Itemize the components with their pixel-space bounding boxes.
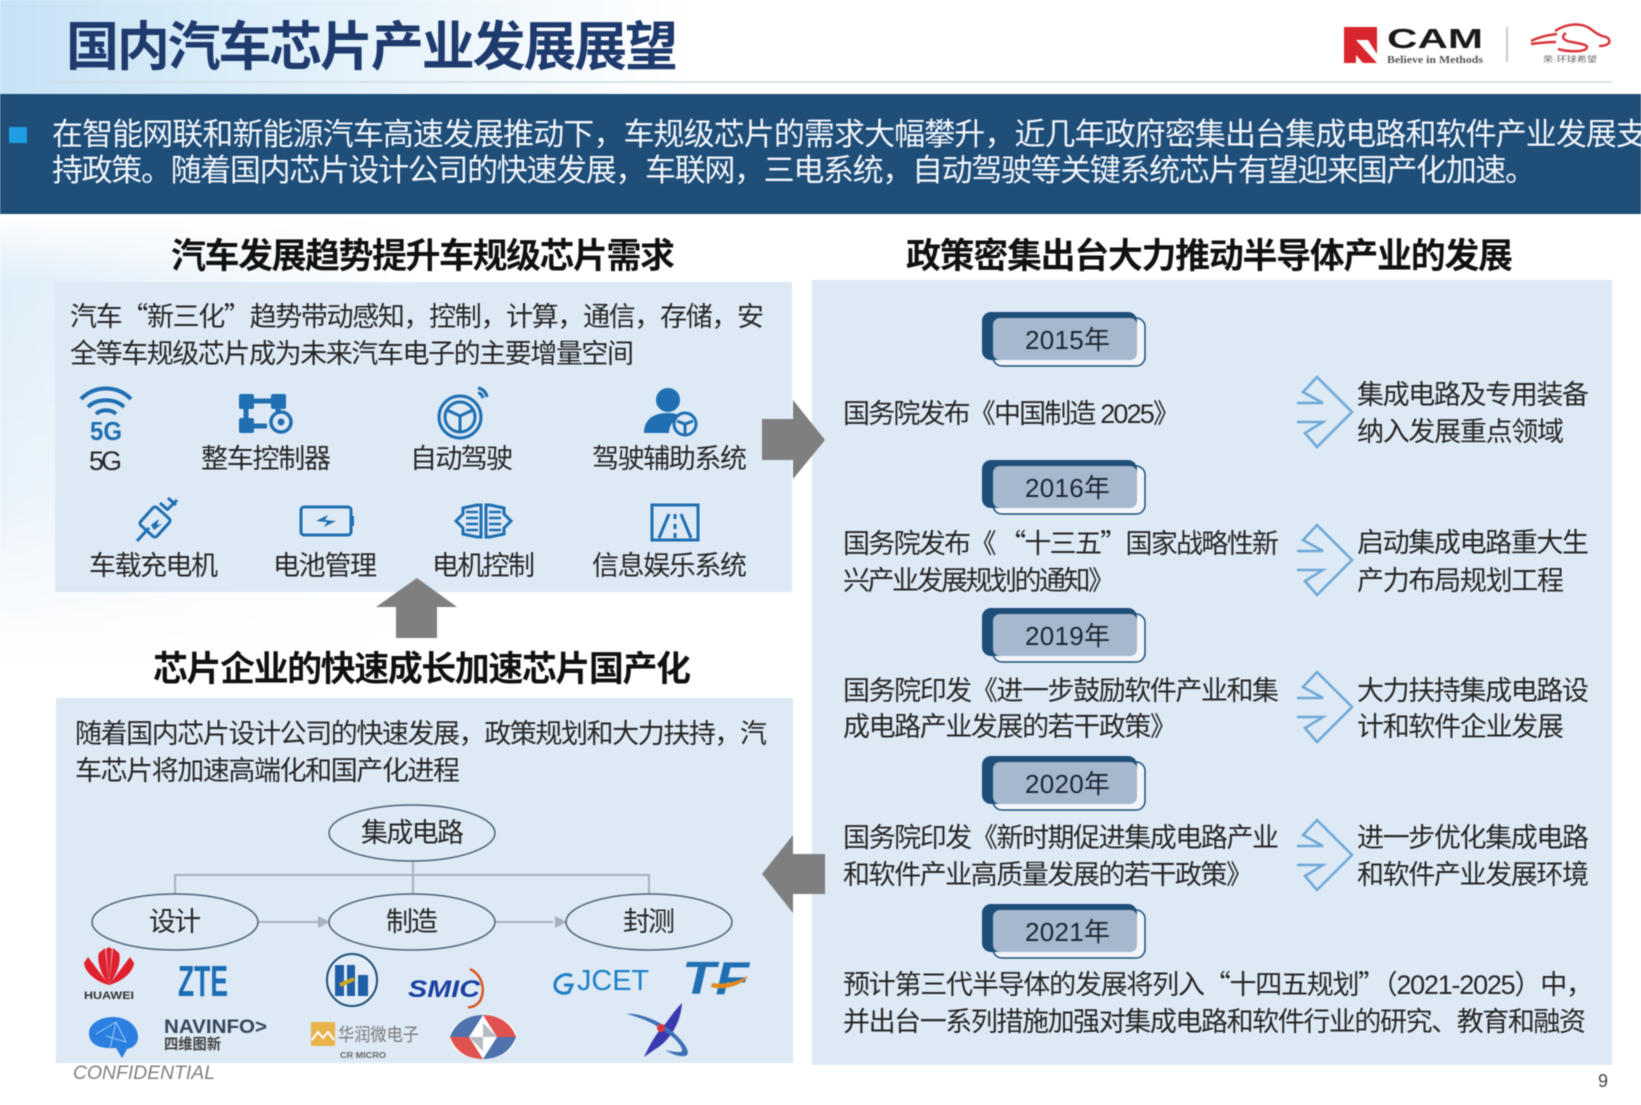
- year badge: 2021: 2021年: [1025, 917, 1110, 947]
- logo: diamond emblem: [450, 1015, 516, 1059]
- policy text 2015: 国务院发布《中国制造 2025》: [843, 399, 1180, 429]
- year badge: 2015: [982, 312, 1145, 366]
- policy text 2020: 和软件产业高质量发展的若干政策》: [843, 860, 1253, 890]
- banner text: 在智能网联和新能源汽车高速发展推动下，车规级芯片的需求大幅攀升，近几年政府密集出台集成电路和软件产业发展支: [52, 117, 1641, 152]
- confidential mark: CONFIDENTIAL: [73, 1063, 215, 1084]
- node: 封测: [566, 894, 732, 950]
- outcome 2020: 进一步优化集成电路: [1357, 823, 1589, 853]
- outcome 2019: 计和软件企业发展: [1357, 712, 1564, 742]
- year badge: 2020: 2020年: [1025, 769, 1110, 799]
- policy text 2021: 预计第三代半导体的发展将列入“十四五规划”（2021-2025）中，: [843, 963, 1593, 1002]
- node: 制造: 制造: [386, 907, 438, 937]
- outcome 2019: 大力扶持集成电路设: [1357, 676, 1589, 706]
- icon: charger: [137, 498, 177, 541]
- panel: chip companies: [56, 698, 793, 1063]
- label: vehicle controller: 整车控制器: [201, 444, 331, 474]
- intro banner: [0, 94, 1641, 214]
- chevron 2020: [1297, 820, 1352, 890]
- logo: NavInfo: 四维图新: [164, 1035, 221, 1053]
- year badge: 2020: [982, 756, 1145, 810]
- logo: ZTE: ZTE: [178, 957, 228, 1006]
- icon: battery: [301, 507, 354, 535]
- outcome 2016: 启动集成电路重大生: [1357, 528, 1589, 558]
- outcome 2016: 产力布局规划工程: [1357, 566, 1564, 596]
- tree connectors: [175, 861, 649, 928]
- outcome 2015: 纳入发展重点领域: [1357, 417, 1564, 447]
- heading: policy: 政策密集出台大力推动半导体产业的发展: [906, 237, 1513, 276]
- page number: 9: [1598, 1071, 1608, 1091]
- logo: NavInfo: [164, 1017, 267, 1053]
- panel: demand: [55, 282, 792, 592]
- chevron 2015: [1297, 377, 1352, 447]
- node: 制造: [329, 894, 495, 950]
- label: infotainment: 信息娱乐系统: [592, 551, 747, 581]
- policy text 2019: 成电路产业发展的若干政策》: [843, 712, 1177, 742]
- icon: 5G: [81, 388, 131, 446]
- chevron 2019: [1297, 672, 1352, 742]
- year badge: 2015: 2015年: [1025, 325, 1110, 355]
- label: motor: 电机控制: [432, 551, 535, 581]
- logo: car: [1507, 24, 1609, 64]
- logo: SMIC: [408, 969, 483, 1007]
- heading: chip companies: 芯片企业的快速成长加速芯片国产化: [153, 650, 691, 689]
- policy text 2020: [843, 823, 1279, 890]
- logo: CR Micro: 华润微电子: [338, 1025, 419, 1045]
- icon: infotainment: [652, 505, 698, 540]
- logo: Hua Hong: [327, 954, 377, 1006]
- logo: CAM: [1344, 23, 1483, 66]
- panel: demand: 汽车“新三化”趋势带动感知，控制，计算，通信，存储，安: [70, 295, 764, 334]
- outcome 2015: 集成电路及专用装备: [1357, 380, 1589, 410]
- bullet: [9, 127, 27, 143]
- policy text 2021: 并出台一系列措施加强对集成电路和软件行业的研究、教育和融资: [843, 1007, 1586, 1037]
- node: 封测: 封测: [623, 907, 675, 937]
- policy text 2019: [843, 676, 1279, 742]
- panel: chip companies: 车芯片将加速高端化和国产化进程: [75, 756, 460, 786]
- label: 5G: 5G: [89, 446, 122, 476]
- year badge: 2019: 2019年: [1025, 621, 1110, 651]
- logo: rocket: [626, 1003, 688, 1057]
- icon: driver assist: [644, 388, 696, 435]
- logo: JCET: JCET: [577, 965, 649, 997]
- icon: vehicle controller: [239, 394, 291, 433]
- logo: CR Micro: [311, 1022, 419, 1060]
- outcome 2020: 和软件产业发展环境: [1357, 860, 1589, 890]
- logo: TF: TF: [682, 952, 751, 1004]
- year badge: 2016: [982, 460, 1145, 514]
- policy text 2016: 兴产业发展规划的通知》: [843, 566, 1115, 596]
- policy text 2019: 国务院印发《进一步鼓励软件产业和集: [843, 676, 1279, 706]
- logo: CR Micro: CR MICRO: [340, 1051, 386, 1060]
- outcome 2015: [1357, 380, 1589, 447]
- node: 集成电路: [329, 805, 495, 861]
- background wash: [0, 0, 1641, 664]
- banner text: 持政策。随着国内芯片设计公司的快速发展，车联网，三电系统，自动驾驶等关键系统芯片有望迎来国产化加速。: [52, 153, 1536, 188]
- node: 设计: [92, 894, 258, 950]
- outcome 2019: [1357, 676, 1589, 742]
- panel: demand: 全等车规级芯片成为未来汽车电子的主要增量空间: [70, 339, 634, 369]
- logo: Huawei: [84, 947, 134, 1002]
- title: 国内汽车芯片产业发展展望: [66, 18, 678, 77]
- arrow: up: [376, 578, 457, 638]
- node: 集成电路: 集成电路: [361, 818, 464, 848]
- policy text 2020: 国务院印发《新时期促进集成电路产业: [843, 823, 1279, 853]
- logo: NavInfo: NAVINFO>: [164, 1017, 267, 1038]
- heading: demand: 汽车发展趋势提升车规级芯片需求: [171, 237, 675, 276]
- panel: chip companies: 随着国内芯片设计公司的快速发展，政策规划和大力扶持，汽: [75, 719, 767, 749]
- policy text 2021: [843, 963, 1593, 1037]
- year badge: 2021: [982, 904, 1145, 958]
- logo: brain: [89, 1017, 138, 1058]
- outcome 2020: [1357, 823, 1589, 890]
- logo: Huawei: HUAWEI: [84, 990, 134, 1002]
- arrow: left: [762, 835, 825, 913]
- icon: steering wheel: [439, 388, 487, 438]
- icon: motor: [456, 505, 511, 537]
- policy text 2016: 国务院发布《 “十三五”国家战略性新: [843, 522, 1279, 561]
- label: autonomous driving: 自动驾驶: [410, 444, 513, 474]
- logo: SMIC: SMIC: [408, 976, 481, 1003]
- panel: policy timeline: [812, 280, 1612, 1065]
- year badge: 2019: [982, 608, 1145, 662]
- node: 设计: 设计: [149, 907, 201, 937]
- year badge: 2016: 2016年: [1025, 473, 1110, 503]
- logo: CAM: CAM: [1387, 23, 1483, 54]
- logo: CAM: Believe in Methods: [1387, 55, 1483, 66]
- banner text: [52, 117, 1641, 188]
- outcome 2016: [1357, 528, 1589, 596]
- arrow: right: [762, 400, 825, 479]
- label: charger: 车载充电机: [89, 551, 218, 581]
- policy text 2016: [843, 522, 1279, 596]
- logo: car: 荣·环球希望: [1543, 54, 1597, 64]
- label: driver assist: 驾驶辅助系统: [592, 444, 747, 474]
- chevron 2016: [1297, 525, 1352, 595]
- label: battery: 电池管理: [273, 551, 377, 581]
- icon: 5G: 5G: [90, 416, 122, 446]
